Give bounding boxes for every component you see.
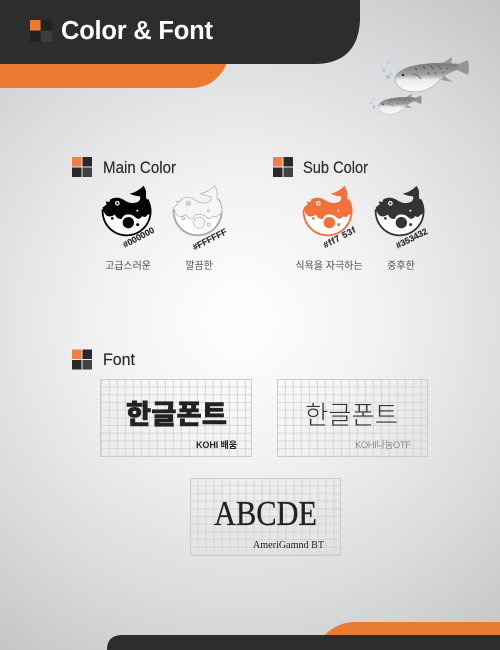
illustration: pufferfish bbox=[370, 57, 469, 114]
font card: bold Korean: 한글폰트 bbox=[126, 393, 227, 432]
hex label: #ff7 53f bbox=[322, 225, 358, 250]
dark header banner bbox=[0, 0, 360, 64]
header icon bbox=[30, 20, 52, 42]
footer orange tab bbox=[320, 622, 500, 650]
hex label: #FFFFFF bbox=[191, 226, 229, 252]
font card: bold Korean bbox=[100, 380, 252, 456]
section heading: Font: Font bbox=[103, 350, 135, 369]
hex label: #000000 bbox=[121, 225, 156, 250]
swatch: dark bbox=[376, 186, 429, 251]
swatch: orange bbox=[304, 186, 358, 250]
font card: serif Latin: AmeriGamnd BT bbox=[253, 540, 325, 551]
font card: serif Latin: ABCDE bbox=[214, 494, 317, 533]
caption: 식욕을 자극하는 bbox=[295, 259, 363, 272]
section heading: Sub Color bbox=[273, 157, 368, 177]
title: Color & Font bbox=[61, 17, 214, 45]
swatch: white bbox=[174, 186, 229, 252]
large fish bbox=[395, 57, 469, 92]
font card: light Korean bbox=[278, 380, 428, 456]
swatch: black bbox=[103, 186, 156, 250]
caption: 고급스러운 bbox=[105, 260, 151, 272]
section heading: Sub Color: Sub Color bbox=[303, 158, 368, 177]
hex label: #353432 bbox=[394, 226, 429, 251]
font card: bold Korean: KOHI 배움 bbox=[196, 439, 237, 450]
font card: light Korean: KOHI나눔OTF bbox=[355, 440, 411, 451]
section heading: Font bbox=[72, 350, 135, 370]
footer dark bar bbox=[107, 635, 500, 650]
font card: light Korean: 한글폰트 bbox=[305, 395, 398, 432]
font card: serif Latin bbox=[190, 478, 340, 556]
bubbles bbox=[370, 61, 392, 108]
section heading: Main Color bbox=[72, 157, 176, 177]
caption: 중후한 bbox=[387, 260, 415, 272]
orange header tab bbox=[0, 60, 228, 88]
section heading: Main Color: Main Color bbox=[103, 158, 176, 177]
small fish bbox=[378, 94, 422, 114]
caption: 깔끔한 bbox=[185, 260, 213, 272]
